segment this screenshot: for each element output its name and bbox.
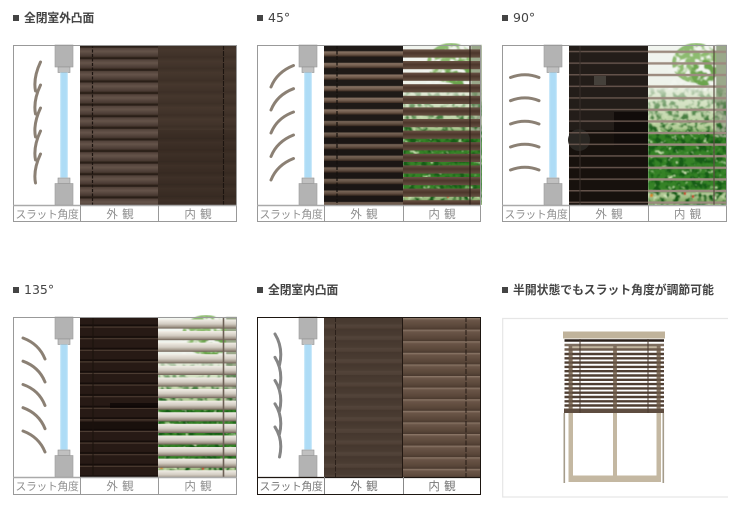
heading: 半開状態でもスラット角度が調節可能: [513, 283, 714, 297]
labels: 内 観: [184, 207, 212, 221]
head box: [563, 332, 665, 338]
heading: [502, 10, 535, 25]
bottom rail and ladder cords: [564, 339, 664, 413]
image frame: [503, 318, 728, 497]
heading: 全閉室外凸面: [24, 11, 94, 25]
blind slats: [564, 340, 664, 406]
labels: 内 観: [674, 207, 702, 221]
labels: スラット角度: [16, 208, 79, 221]
exterior view photo: [80, 317, 158, 477]
labels: 内 観: [428, 479, 456, 493]
interior view photo: [403, 43, 482, 205]
labels: [260, 479, 456, 493]
labels: スラット角度: [260, 208, 323, 221]
table frame: [257, 317, 481, 494]
labels: 外 観: [106, 479, 134, 493]
labels: スラット角度: [16, 480, 79, 493]
labels: 内 観: [184, 479, 212, 493]
table frame: [257, 46, 481, 222]
labels: スラット角度: [505, 208, 568, 221]
exterior view photo: [324, 317, 403, 477]
table frame: [13, 318, 237, 494]
slat angle diagram: [23, 317, 73, 477]
interior view photo: [403, 317, 481, 477]
heading: 90°: [513, 10, 535, 25]
labels: 外 観: [350, 207, 378, 221]
table frame: [13, 46, 237, 222]
window with half-raised blind: [563, 332, 665, 483]
heading: 135°: [24, 282, 54, 297]
panel: 90 degrees: [502, 10, 727, 222]
labels: [16, 479, 212, 493]
exterior view photo: [568, 45, 648, 205]
exterior view photo: [80, 45, 158, 205]
panel: fully closed, inside convex: [257, 283, 481, 494]
table frame: [502, 46, 727, 222]
window frame: [564, 345, 664, 483]
panel: fully closed, outside convex: [13, 11, 237, 222]
panel: half open: [502, 283, 728, 497]
labels: 内 観: [428, 207, 456, 221]
slat angle diagram: [510, 45, 562, 205]
labels: [260, 207, 456, 221]
slat angle diagram: [275, 317, 317, 477]
labels: 外 観: [106, 207, 134, 221]
interior view photo: [158, 315, 237, 477]
exterior view photo: [324, 45, 403, 205]
panel: 135 degrees: [13, 282, 237, 494]
labels: スラット角度: [260, 480, 323, 493]
labels: 外 観: [350, 479, 378, 493]
heading: 45°: [268, 10, 290, 25]
heading: [257, 10, 290, 25]
interior view photo: [158, 45, 237, 205]
labels: 外 観: [595, 207, 623, 221]
labels: [16, 207, 212, 221]
panel: 45 degrees: [257, 10, 482, 222]
interior view photo: [648, 43, 727, 205]
slat angle diagram: [35, 45, 73, 205]
slat angle diagram: [271, 45, 317, 205]
heading: 全閉室内凸面: [268, 283, 338, 297]
labels: [505, 207, 702, 221]
